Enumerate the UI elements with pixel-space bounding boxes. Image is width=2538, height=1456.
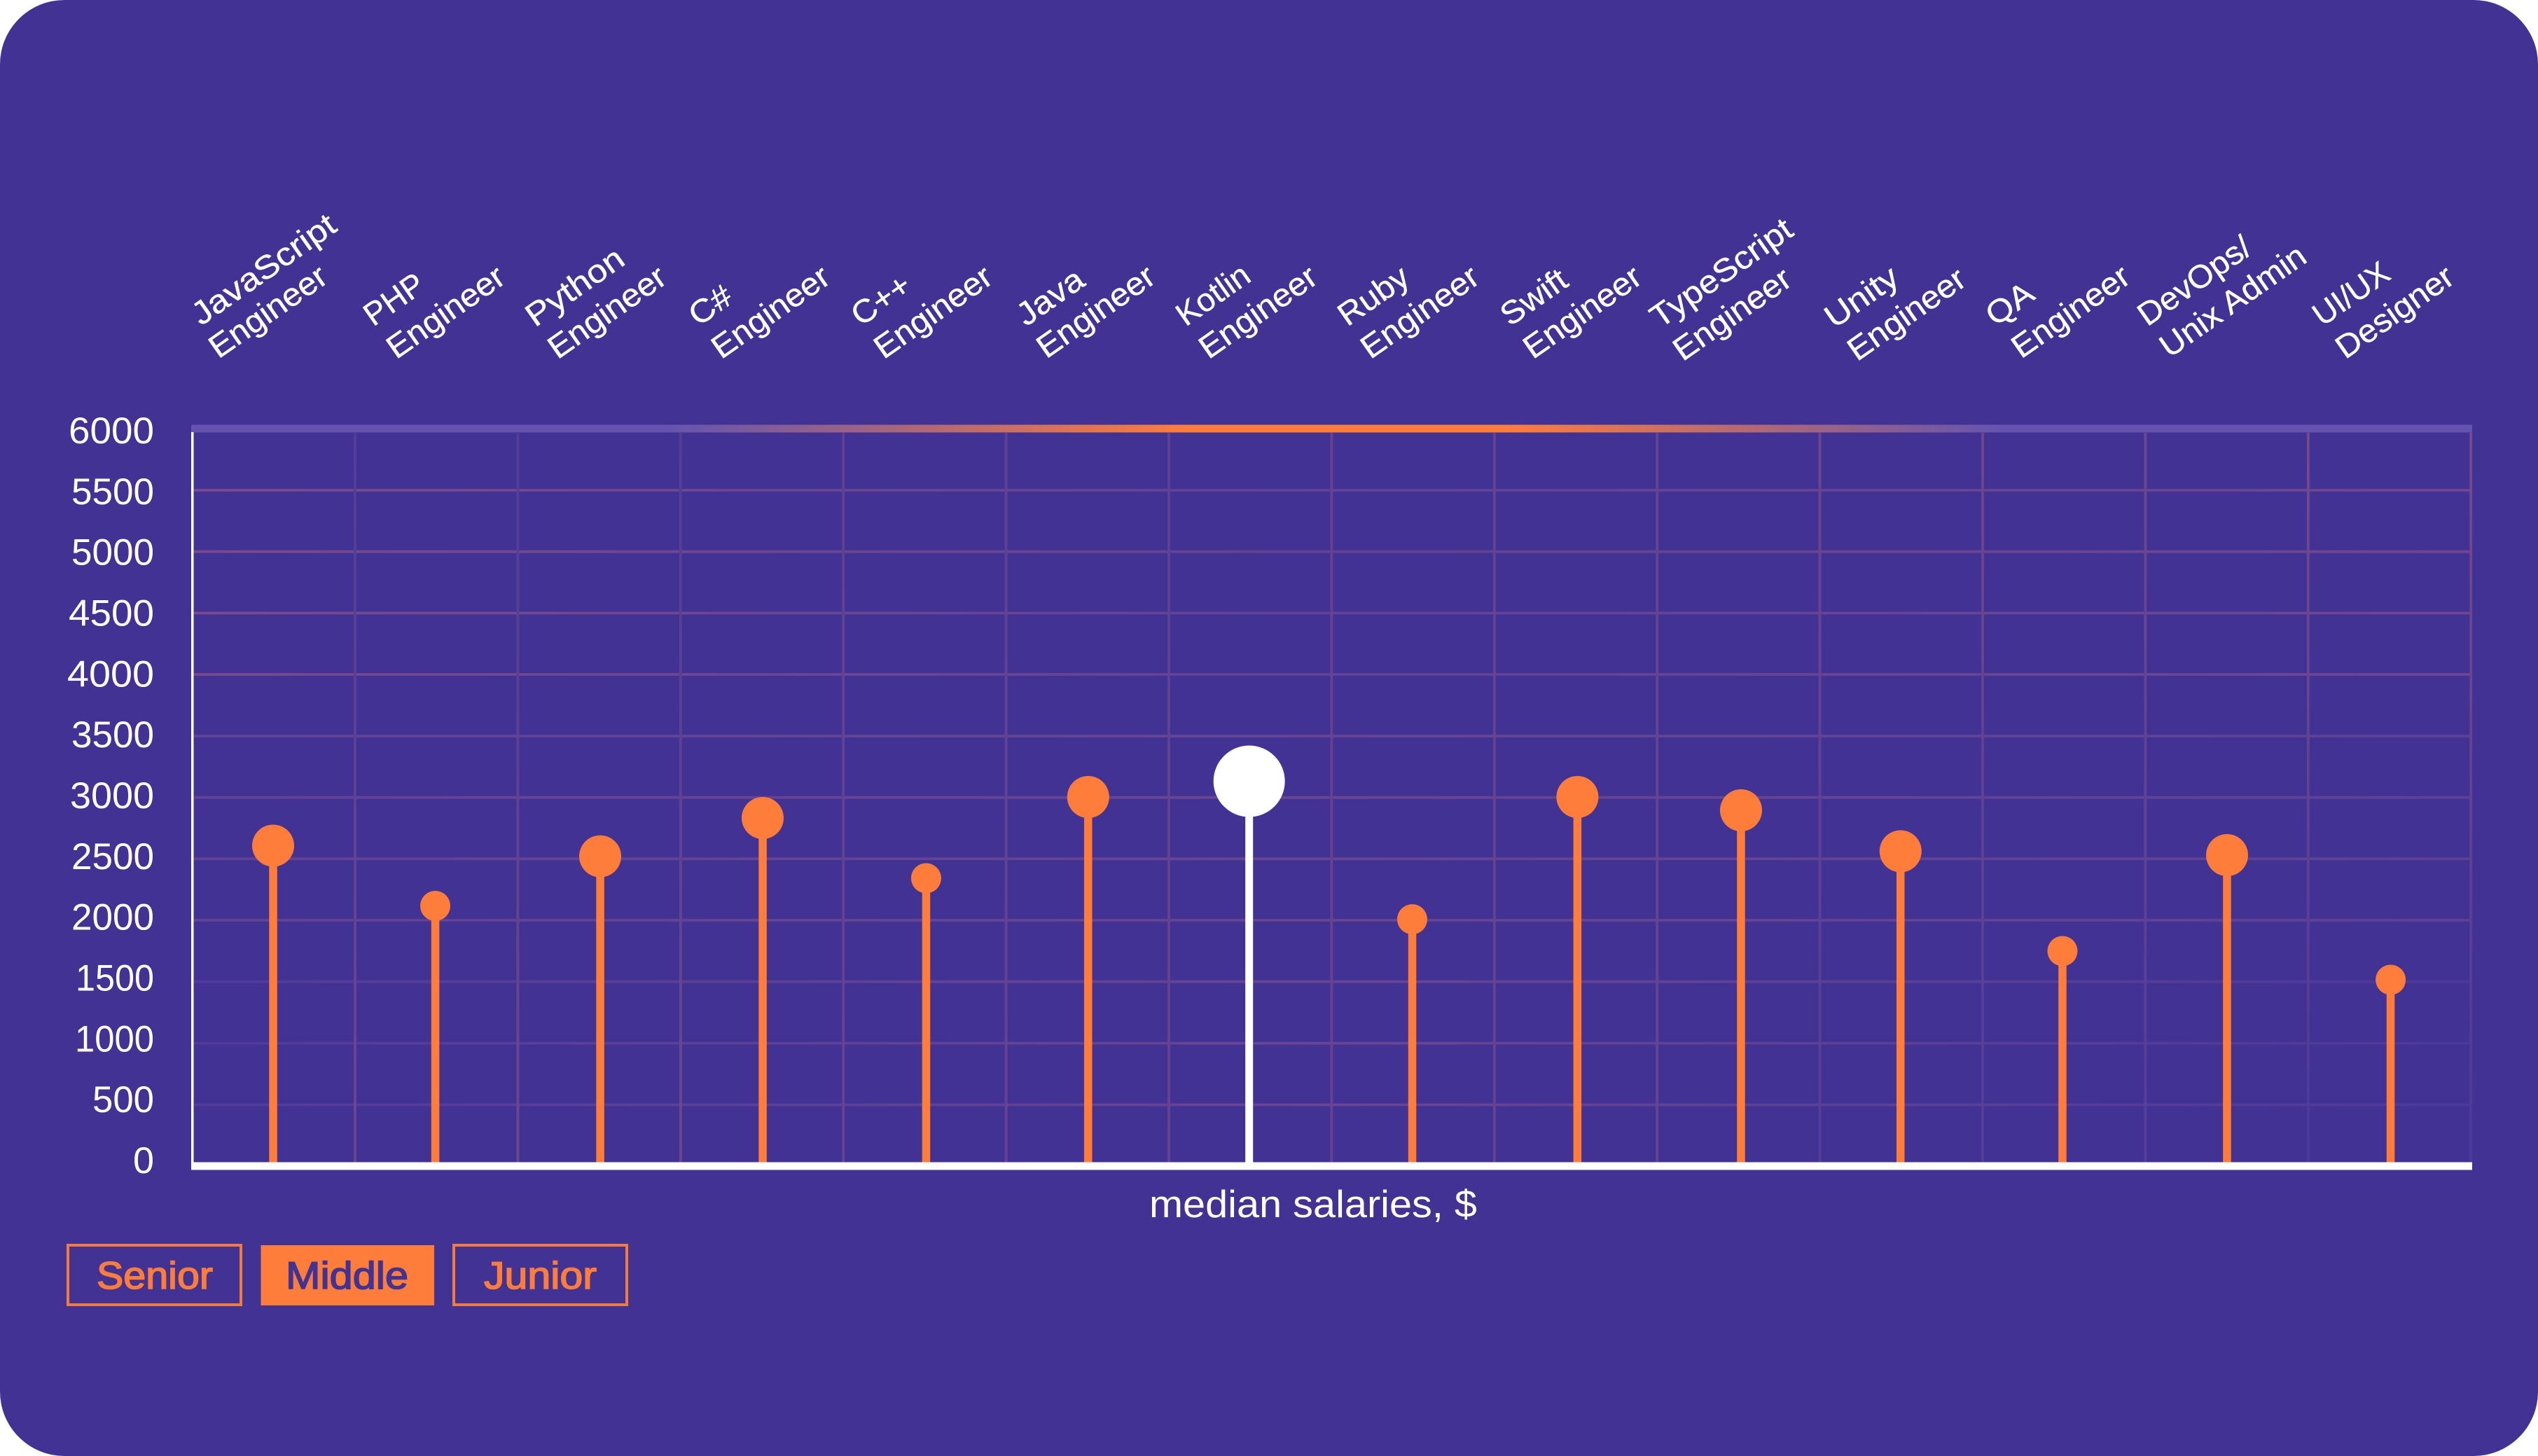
role label: QA Engineer: Engineer bbox=[2004, 257, 2137, 365]
legend button: Senior: Senior bbox=[97, 1254, 213, 1297]
legend button: Middle (active) bbox=[261, 1245, 434, 1305]
role label: C# Engineer: Engineer bbox=[705, 258, 836, 366]
legend button: Middle (active): Middle bbox=[286, 1254, 408, 1297]
role label: C# Engineer: C# bbox=[681, 277, 740, 333]
x axis line bbox=[191, 1163, 2472, 1170]
legend button: Junior bbox=[454, 1245, 627, 1305]
legend button: Junior: Junior bbox=[484, 1254, 597, 1297]
lollipop: Java Engineer bbox=[1067, 776, 1109, 1163]
lollipop: Python Engineer bbox=[579, 836, 621, 1163]
y axis tick labels: 3500 bbox=[71, 714, 154, 756]
role label: Ruby Engineer bbox=[1331, 225, 1485, 366]
role label: C++ Engineer bbox=[844, 225, 999, 366]
role label: C++ Engineer: Engineer bbox=[867, 258, 999, 366]
y axis tick labels: 1000 bbox=[75, 1018, 154, 1060]
lollipop: Ruby Engineer bbox=[1397, 904, 1427, 1163]
role label: JavaScript Engineer: JavaScript bbox=[184, 206, 343, 332]
legend button: Senior bbox=[68, 1245, 241, 1305]
y axis tick labels: 6000 bbox=[69, 410, 154, 452]
role label: Swift Engineer: Engineer bbox=[1516, 258, 1648, 366]
role label: TypeScript Engineer: TypeScript bbox=[1643, 210, 1799, 335]
lollipop: PHP Engineer bbox=[420, 891, 450, 1163]
y axis tick labels: 3000 bbox=[70, 775, 154, 817]
role label: C++ Engineer: C++ bbox=[844, 266, 917, 333]
role label: Ruby Engineer: Engineer bbox=[1354, 258, 1485, 366]
role label: Python Engineer bbox=[518, 226, 673, 366]
role label: Kotlin Engineer: Kotlin bbox=[1169, 256, 1257, 333]
role label: PHP Engineer: Engineer bbox=[380, 258, 511, 366]
top gradient axis bar bbox=[191, 424, 2472, 433]
role label: DevOps / Unix Admin bbox=[2130, 205, 2312, 364]
role label: TypeScript Engineer: Engineer bbox=[1666, 260, 1798, 368]
role label: PHP Engineer bbox=[356, 225, 511, 366]
role label: Unity Engineer: Unity bbox=[1817, 258, 1906, 335]
y axis tick labels: 5500 bbox=[71, 471, 154, 513]
lollipop: UI/UX Designer bbox=[2376, 965, 2406, 1163]
lollipop: QA Engineer bbox=[2048, 936, 2077, 1163]
role label: UI/UX Designer: Designer bbox=[2329, 258, 2460, 366]
role label: JavaScript Engineer: Engineer bbox=[202, 257, 334, 365]
y axis tick labels: 1500 bbox=[76, 958, 154, 999]
lollipop: TypeScript Engineer bbox=[1720, 789, 1762, 1163]
lollipop: C# Engineer bbox=[742, 797, 784, 1163]
lollipop: JavaScript Engineer bbox=[252, 825, 294, 1163]
lollipop: DevOps / Unix Admin bbox=[2206, 834, 2248, 1163]
lollipop: C++ Engineer bbox=[911, 863, 941, 1163]
y axis tick labels: 4500 bbox=[69, 592, 154, 635]
y axis tick labels: 500 bbox=[92, 1079, 154, 1121]
role label: Unity Engineer: Engineer bbox=[1840, 260, 1972, 368]
role label: Java Engineer: Java bbox=[1009, 261, 1091, 333]
y axis tick labels: 5000 bbox=[71, 532, 154, 574]
y axis tick labels: 2000 bbox=[71, 897, 154, 938]
role label: Kotlin Engineer: Engineer bbox=[1192, 258, 1324, 366]
lollipop: Unity Engineer bbox=[1880, 831, 1922, 1163]
y axis tick labels: 0 bbox=[133, 1140, 154, 1181]
y axis tick labels: 2500 bbox=[71, 836, 154, 878]
role label: UI/UX Designer bbox=[2305, 225, 2460, 366]
role label: C# Engineer bbox=[681, 225, 836, 366]
role label: Swift Engineer: Swift bbox=[1493, 261, 1574, 333]
role label: DevOps / Unix Admin: Unix Admin bbox=[2152, 237, 2312, 364]
role label: Unity Engineer bbox=[1817, 227, 1972, 368]
lollipop: Kotlin Engineer (highlighted) bbox=[1214, 745, 1285, 1163]
role label: JavaScript Engineer bbox=[184, 206, 343, 365]
role label: Kotlin Engineer bbox=[1169, 225, 1324, 366]
role label: QA Engineer: QA bbox=[1978, 274, 2041, 333]
role label: Swift Engineer bbox=[1493, 225, 1648, 366]
role label: Java Engineer: Engineer bbox=[1029, 257, 1162, 365]
lollipop: Swift Engineer bbox=[1556, 776, 1598, 1163]
role label: Python Engineer: Python bbox=[518, 240, 631, 333]
role label: DevOps / Unix Admin: DevOps/ bbox=[2130, 228, 2258, 333]
role label: TypeScript Engineer bbox=[1643, 210, 1822, 368]
role label: Ruby Engineer: Ruby bbox=[1331, 258, 1415, 333]
role label: Python Engineer: Engineer bbox=[541, 258, 673, 366]
x axis title: median salaries, $ bbox=[1149, 1182, 1477, 1226]
y axis line bbox=[191, 432, 193, 1163]
y axis tick labels: 4000 bbox=[67, 653, 154, 695]
role label: PHP Engineer: PHP bbox=[356, 265, 431, 333]
y axis tick labels bbox=[67, 410, 154, 1181]
role label: UI/UX Designer: UI/UX bbox=[2305, 254, 2397, 333]
